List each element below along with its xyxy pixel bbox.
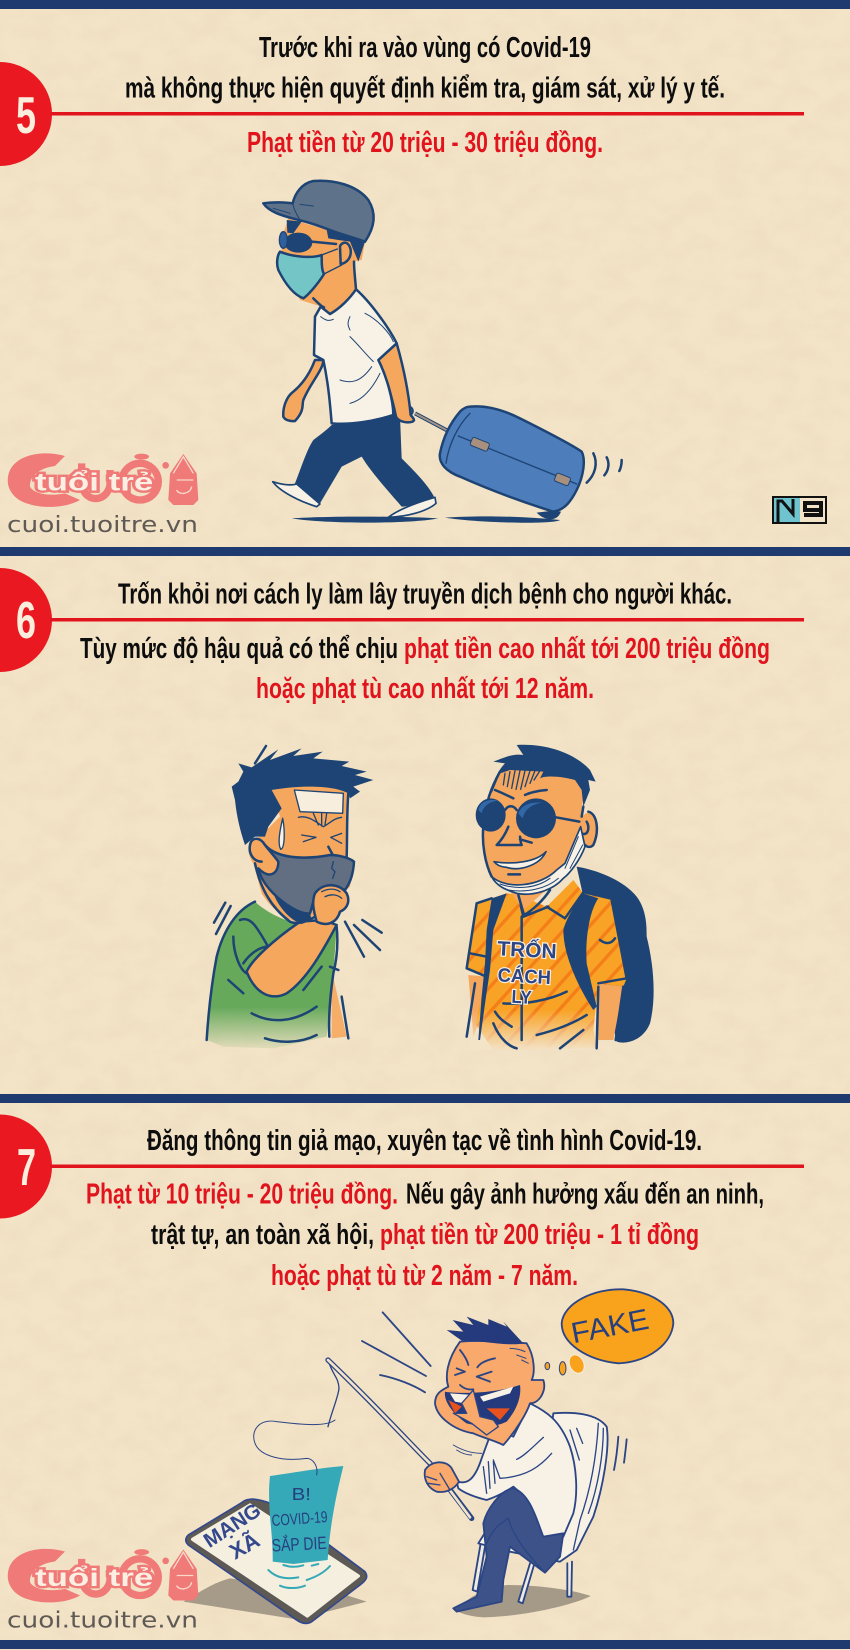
logo: cuoi tuoi tre: tuổi trẻ [35,1565,153,1592]
penalty text 7: Phạt từ 10 triệu - 20 triệu đồng. [86,1178,398,1210]
red rule [50,1164,804,1168]
number badge 5: 5 [16,87,36,145]
logo: N9 artist mark [773,497,826,523]
penalty text 7: phạt tiền từ 200 triệu - 1 tỉ đồng [380,1219,699,1251]
illustration: phone with fake news paper on fishing line [183,1420,367,1623]
panel: rule 6 [0,568,804,1050]
penalty text 6: hoặc phạt tù cao nhất tới 12 năm. [256,673,594,705]
red rule [50,618,804,622]
number badge 7 [0,1114,52,1218]
panel: rule 5 [0,32,826,538]
logo: cuoi tuoi tre: tuổi trẻ [35,470,153,497]
logo: cuoi tuoi tre: cuoi.tuoitre.vn [7,1608,198,1634]
number badge 5 [0,62,52,166]
illustration: traveller with suitcase [263,181,622,523]
illustration: man escaping quarantine in orange shirt: LY [511,986,533,1008]
penalty text 6: Tùy mức độ hậu quả có thể chịu [80,633,398,665]
logo: cuoi tuoi tre: cuoi.tuoitre.vn [7,513,198,538]
heading: violation 5 [125,32,725,104]
number badge 6: 6 [16,592,36,650]
illustration: man escaping quarantine in orange shirt: CÁCH [497,963,552,989]
logo: cuoi tuoi tre [7,1549,198,1634]
penalty text 7 [86,1178,764,1292]
red rule [50,112,804,116]
logo: cuoi tuoi tre [7,453,198,538]
illustration: laughing man in chair with fishing rod and FAKE bubble: FAKE [568,1303,652,1350]
illustration: phone with fake news paper on fishing line: SẮP DIE [271,1532,327,1556]
heading: violation 5: Trước khi ra vào vùng có Covid-19 [259,32,591,64]
illustration: man escaping quarantine in orange shirt [467,745,654,1050]
panel: rule 7 [0,1114,804,1634]
illustration: phone with fake news paper on fishing line: MẠNG [200,1499,265,1553]
illustration: phone with fake news paper on fishing line: B! [292,1484,311,1504]
penalty text 7: trật tự, an toàn xã hội, [151,1219,374,1251]
illustration: phone with fake news paper on fishing line: XÃ [225,1527,264,1564]
illustration: phone with fake news paper on fishing line: COVID-19 [271,1509,328,1530]
penalty text 5: Phạt tiền từ 20 triệu - 30 triệu đồng. [247,127,603,159]
illustration: laughing man in chair with fishing rod and FAKE bubble [328,1289,673,1617]
illustration: coughing man in green shirt [207,746,382,1048]
number badge 6 [0,568,52,672]
penalty text 6 [80,633,770,705]
number badge 7: 7 [17,1139,36,1197]
penalty text 7: hoặc phạt tù từ 2 năm - 7 năm. [271,1260,578,1292]
illustration: man escaping quarantine in orange shirt: TRỐN [497,936,557,963]
